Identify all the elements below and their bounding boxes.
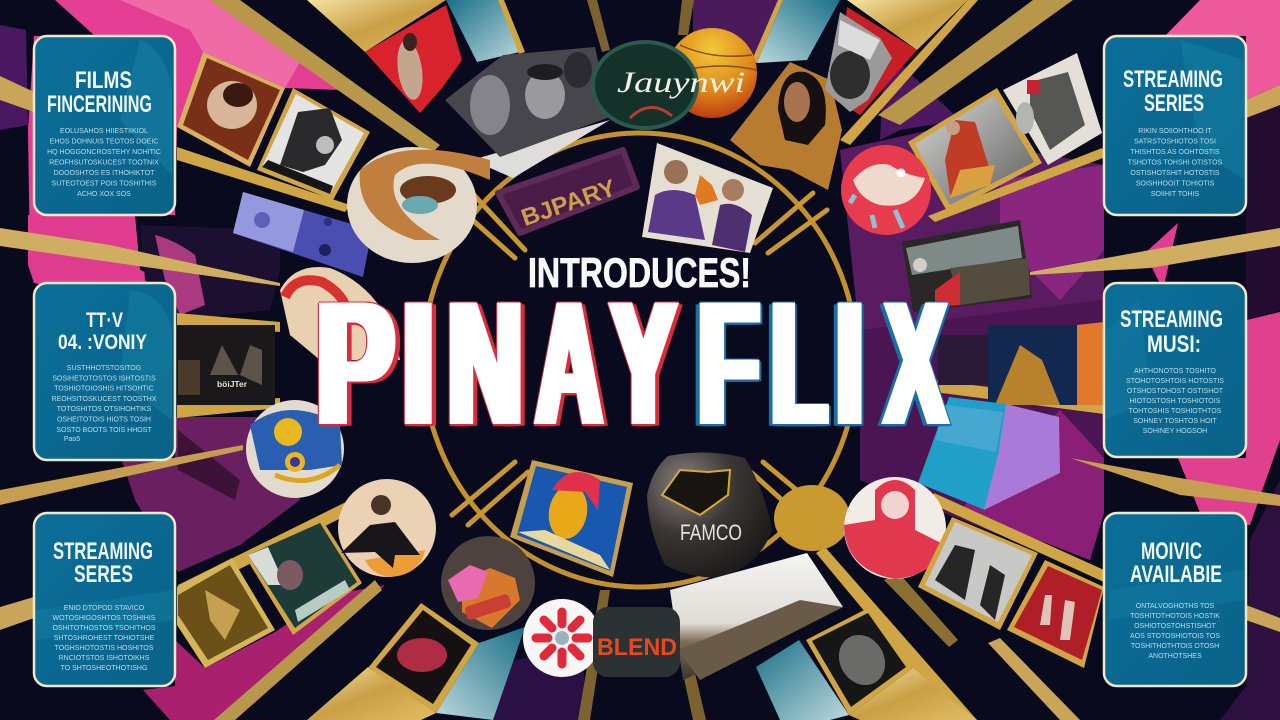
icon: man on orange circle bbox=[338, 479, 436, 577]
title word: pinay bbox=[317, 265, 683, 463]
panel heading: TT·V bbox=[86, 309, 123, 332]
panel body text: ONTALVOGHOTHS TOS bbox=[1136, 603, 1215, 610]
icon: translucent blue and purple shape bbox=[918, 397, 1060, 510]
panel body text: REOHSITOSKUCEST TOOSTHX bbox=[52, 396, 157, 403]
photo: bottom left meat tile bbox=[368, 603, 479, 713]
panel body text: SUTEOTOEST POIS TOSHITHIS bbox=[52, 180, 157, 188]
heading: introduces: INTRODUCES! bbox=[528, 249, 751, 296]
icon: red and white map ball bbox=[844, 477, 946, 579]
panel body text: OSTISHOTSHIT HOTOSTIS bbox=[1130, 170, 1220, 177]
panel: streaming music bbox=[1104, 283, 1246, 457]
panel body text: SOHNEY TOSHTOS HOIT bbox=[1133, 418, 1217, 425]
panel heading: 04. :VONIY bbox=[58, 331, 147, 354]
icon: dark helmet: FAMCO bbox=[680, 520, 742, 545]
panel body text: ACHO XOX SOS bbox=[77, 191, 131, 198]
title word: flix: F bbox=[698, 265, 759, 463]
panel body text: WOTOSHIGOSHTOS TOSHIHIS bbox=[53, 615, 156, 622]
panel body text: OSHEITOTOIS HIOTS TOSIH bbox=[57, 416, 151, 424]
title word: flix: L bbox=[771, 265, 827, 463]
panel body text: SOIIHIT TOHIS bbox=[1151, 191, 1199, 198]
photo: top right black and white face bbox=[825, 7, 917, 115]
panel body text: EOLUSAHOS HIIESTIIKIOL bbox=[60, 128, 148, 135]
photo: bottom left teal scene bbox=[243, 518, 362, 635]
panel body text: TOHTOSHIS TOSHIOTHTOS bbox=[1129, 408, 1222, 415]
photo: right woman bbox=[908, 88, 1042, 213]
panel heading bbox=[47, 67, 152, 118]
panel body text: SOISHHOOIT TOHIOTIS bbox=[1136, 180, 1215, 188]
panel body text: OSHIOTOSTOHSTISHOT bbox=[1134, 623, 1217, 630]
panel heading bbox=[1120, 306, 1223, 358]
panel body text: THISHTOS AS OOHTOSTIS bbox=[1130, 149, 1220, 156]
photo: woman in gold bbox=[730, 62, 842, 190]
panel body text: STOHOTOSHTOIS HOTOSTIS bbox=[1126, 378, 1224, 385]
panel body text: TOSHITOTHOTOIS HOSTIK bbox=[1130, 613, 1220, 620]
panel heading: STREAMING bbox=[1123, 66, 1223, 93]
title word: flix: X bbox=[885, 265, 946, 463]
panel body text: TOGHSHOTOSTIS HOSHITOS bbox=[55, 645, 154, 652]
panel body text: HQ HOGGONCROSTEHY NOHITIC bbox=[47, 149, 161, 156]
title word: pinay: N bbox=[448, 265, 522, 463]
photo: top black and white group bbox=[445, 47, 610, 178]
panel body text: SOSTO BOOTS TOIS HHOST bbox=[56, 427, 152, 434]
photo: left dark stage bbox=[177, 325, 275, 405]
icon: cream and red dish bbox=[280, 267, 400, 360]
logo: white circle with red flower bbox=[523, 599, 601, 677]
photo: top red tile bbox=[365, 5, 462, 113]
logo: green emblem bbox=[593, 42, 745, 128]
stage caption: böiJTer bbox=[217, 379, 248, 389]
title word: pinay: Y bbox=[611, 265, 676, 463]
panel: movie available bbox=[1104, 513, 1246, 686]
logo: black blend badge: BLEND bbox=[597, 634, 677, 661]
icon: fur ring bbox=[347, 147, 490, 263]
panel body text: DOOOSHTOS ES ITHOHIKTOT bbox=[54, 170, 155, 177]
panel body text: ANOTHOTSHES bbox=[1148, 653, 1202, 660]
panel body text: SOSIHETOTOSTOS ISHTOSTIS bbox=[52, 375, 156, 382]
gold chopstick crosses bbox=[452, 193, 827, 528]
icon: orange character ball bbox=[441, 536, 535, 630]
panel heading: AVAILABIE bbox=[1130, 561, 1222, 588]
photo: crowd bbox=[670, 553, 843, 680]
title word: pinay: A bbox=[536, 265, 602, 463]
panel body text: SATRSTOSHIOTOS TOSI bbox=[1134, 138, 1216, 146]
panel heading bbox=[1130, 538, 1222, 588]
photo: right black and white couple bbox=[1003, 53, 1102, 165]
icon: colourful left sphere bbox=[246, 400, 344, 498]
photo: bottom left gold interior bbox=[177, 558, 275, 668]
central gold ring bbox=[423, 133, 857, 587]
panel heading: SERES bbox=[74, 561, 133, 588]
panel: streaming series left bbox=[34, 513, 175, 686]
panel: streaming series right bbox=[1104, 36, 1246, 215]
panel heading: MUSI: bbox=[1147, 331, 1201, 358]
panel body text: AOS STOTOSHIOTOIS TOS bbox=[1130, 633, 1220, 640]
panel: films fincerining bbox=[34, 36, 175, 215]
panel body text: TO SHTOSHEOTHOTISHG bbox=[61, 665, 147, 672]
panel body text: SUSTHHOTSTOSITOG bbox=[67, 365, 141, 372]
panel heading bbox=[58, 309, 147, 354]
panel body text: TSHOTOS TOHSHI OTISTOS bbox=[1128, 160, 1223, 166]
photo: right festival bbox=[938, 322, 1104, 405]
icon: gold disc bbox=[774, 485, 850, 551]
panel heading: STREAMING bbox=[53, 538, 153, 565]
panel body text: SOHINEY HOGSOH bbox=[1143, 428, 1207, 435]
panel body text: RIKIN SOIIOHTHOO IT bbox=[1138, 128, 1212, 135]
panel body text: REOFHSUTOSKUCEST TOOTNIX bbox=[49, 160, 159, 166]
photo: bottom right black and white crowd bbox=[918, 517, 1038, 630]
icon: blue device bbox=[233, 192, 372, 277]
panel body text: OSHITOTHOSTOS TSOHITHOS bbox=[52, 625, 156, 632]
title word: pinay: P bbox=[317, 265, 393, 463]
title word: pinay: I bbox=[403, 265, 434, 463]
panel heading bbox=[53, 538, 153, 588]
logo: black blend badge bbox=[593, 607, 680, 677]
icon: orange globe bbox=[667, 28, 757, 118]
panel body text: ENIO DTOPOD STAVICO bbox=[64, 605, 145, 612]
photo: toy character tile bbox=[510, 460, 633, 577]
photo: screen device bbox=[902, 220, 1032, 312]
panel body text: Pao5 bbox=[64, 436, 80, 443]
panel heading: STREAMING bbox=[1120, 306, 1223, 333]
icon: red and white ball bbox=[841, 145, 931, 235]
panel body text: AHTHONOTOS TOSHITO bbox=[1134, 368, 1217, 375]
panel heading: SERIES bbox=[1144, 90, 1204, 117]
logo: maroon pill bbox=[498, 150, 637, 233]
photo: bottom right red tile bbox=[1007, 560, 1104, 668]
photo: two people bbox=[642, 143, 773, 253]
panel heading: FILMS bbox=[75, 67, 132, 94]
panel heading bbox=[1123, 66, 1223, 117]
panel body text: RNCIOTSTOS ISHOTOIKHS bbox=[59, 655, 150, 662]
photo: top left brown bbox=[177, 52, 285, 167]
title word: flix: I bbox=[836, 265, 864, 463]
panel body text: TOSHIOTOIOSHIS HITSOHTIC bbox=[54, 386, 154, 393]
panel body text: TOSHITHOTHTOIS OTOSH bbox=[1131, 643, 1219, 650]
panel body text: EHOS DOHNUIS TEOTOS DOEIC bbox=[50, 138, 158, 146]
logo: green emblem: Jauynwi bbox=[617, 66, 745, 99]
panel body text: HIOTOSTOSH TOSHIOTOIS bbox=[1130, 398, 1221, 405]
logo: maroon pill: BJPARY bbox=[518, 175, 619, 232]
icon: dark helmet bbox=[647, 452, 772, 578]
panel body text: TOTOSHITOS OTSIHOHTIKS bbox=[57, 406, 152, 413]
panel body text: OTSHOSTOHOST OSTISHOT bbox=[1127, 388, 1224, 395]
photo: top left black and white bbox=[257, 88, 370, 200]
panel body text: SHTOSHROHEST TOHIOTSHE bbox=[54, 635, 155, 642]
panel heading: FINCERINING bbox=[47, 91, 152, 118]
photo: bottom right face bbox=[806, 607, 913, 715]
panel: tv bbox=[34, 283, 175, 460]
title word: flix bbox=[696, 265, 952, 463]
panel heading: MOIVIC bbox=[1141, 538, 1202, 565]
